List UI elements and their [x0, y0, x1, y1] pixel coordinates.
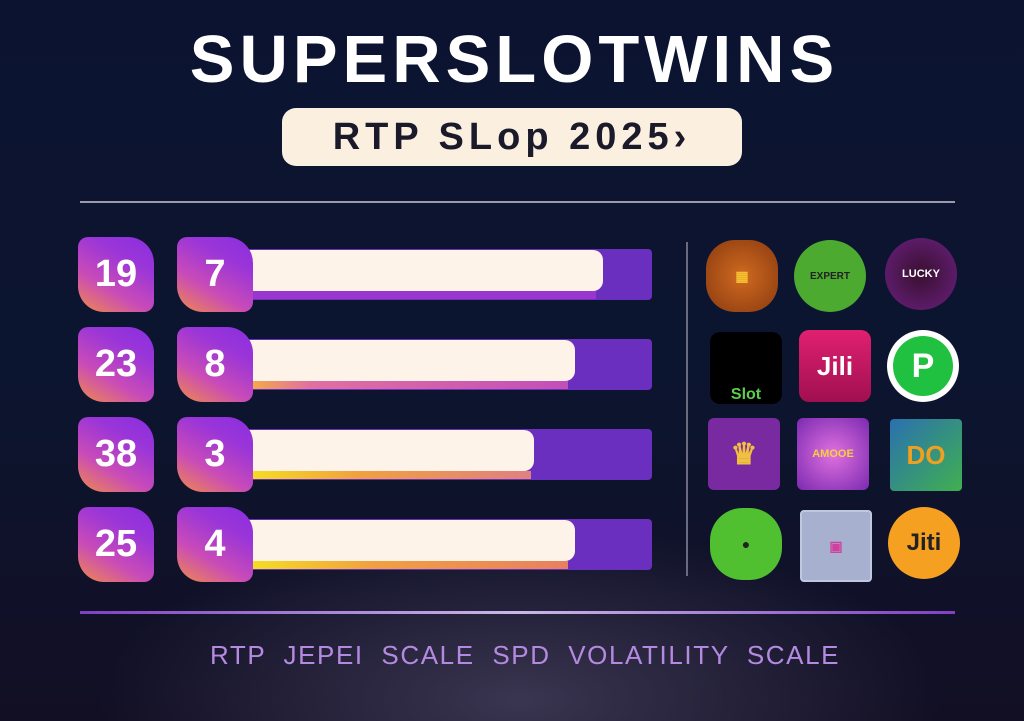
icon: slot: Slot: [731, 386, 761, 403]
footer legend: RTP JEPEI SCALE SPD VOLATILITY SCALE: [210, 640, 840, 670]
row 3: [78, 417, 652, 492]
icon: jili pink: Jili: [817, 350, 853, 380]
icon: burst: AMOOE: [812, 448, 854, 460]
row 3: 3: [204, 433, 226, 475]
icon: purple circle: LUCKY: [902, 268, 940, 280]
row 1: [78, 237, 652, 312]
icon: box: [800, 510, 872, 582]
icon: purple circle: [885, 238, 957, 310]
title: SUPERSLOTWINS: [190, 22, 839, 97]
icon: slot: [710, 332, 782, 404]
icon: chameleon: [710, 508, 782, 580]
row 2: 23: [95, 343, 137, 385]
icon: box: ▣: [829, 538, 843, 554]
row 4: 4: [204, 523, 226, 565]
icon: P: P: [912, 346, 934, 384]
icon: burst: [797, 418, 869, 490]
row 4: 25: [95, 523, 137, 565]
icon: P: [887, 330, 959, 402]
icon: trophy: [708, 418, 780, 490]
row 2: [78, 327, 652, 402]
icon: treasure: ▦: [735, 268, 749, 284]
icon: jiti orange: [888, 507, 960, 579]
row 3: 38: [95, 433, 137, 475]
icon: jiti orange: Jiti: [907, 529, 941, 556]
row 1: 7: [204, 253, 226, 295]
bar chart: [78, 237, 652, 582]
icon: DO: [890, 419, 962, 491]
subtitle pill: [282, 108, 742, 166]
icon: DO: DO: [906, 440, 946, 470]
icon: jili pink: [799, 330, 871, 402]
subtitle pill: RTP SLop 2025›: [333, 116, 691, 158]
icon: treasure: [706, 240, 778, 312]
icon grid: [706, 238, 962, 582]
row 1: 19: [95, 253, 137, 295]
row 4: [78, 507, 652, 582]
icon: green circle: [794, 240, 866, 312]
icon: chameleon: ●: [742, 536, 750, 552]
icon: trophy: ♛: [731, 438, 757, 470]
row 2: 8: [204, 343, 226, 385]
icon: green circle: EXPERT: [810, 270, 850, 282]
